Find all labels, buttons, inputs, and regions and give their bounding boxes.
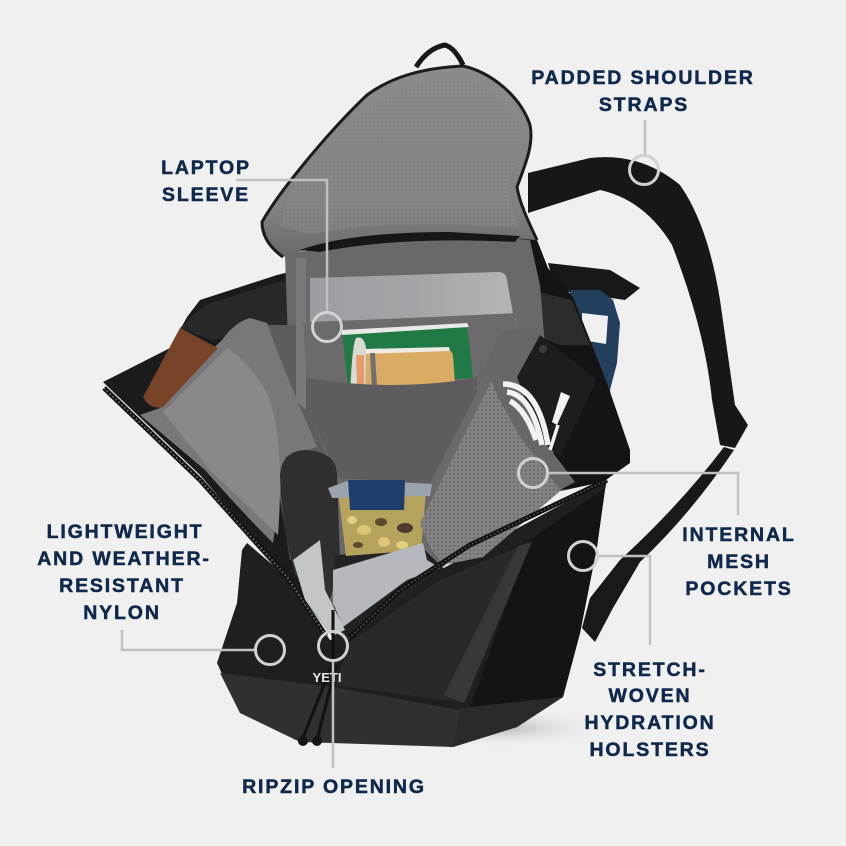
leather pouch <box>143 328 218 408</box>
backpack illustration <box>103 45 748 747</box>
right mesh pocket <box>420 378 573 565</box>
callout: padded shoulder straps: PADDED SHOULDER <box>531 67 755 89</box>
callout: ripzip opening <box>242 632 426 798</box>
callout: hydration holsters <box>568 542 716 761</box>
callout: ripzip opening: RIPZIP OPENING <box>242 776 426 798</box>
body side behind pockets <box>440 236 630 510</box>
brand mark: YETI <box>313 670 341 685</box>
dark shadow under flap <box>300 232 520 252</box>
floor shadow <box>390 708 610 748</box>
laptop sleeve pocket <box>303 313 519 395</box>
callout: nylon <box>37 521 284 664</box>
callout: internal mesh pockets <box>518 458 796 600</box>
snack container <box>328 480 432 556</box>
webbing strip <box>444 542 532 703</box>
callout: internal mesh pockets: INTERNAL <box>682 524 796 546</box>
callout: nylon: AND WEATHER- <box>37 548 211 570</box>
callout: hydration holsters: WOVEN <box>609 685 691 707</box>
water bottle in holster <box>280 450 340 600</box>
seam strip <box>296 258 306 410</box>
callout: internal mesh pockets: POCKETS <box>685 578 793 600</box>
callout: nylon: RESISTANT <box>59 575 185 597</box>
carry handle <box>416 45 463 67</box>
callout: laptop sleeve: LAPTOP <box>161 157 251 179</box>
left flap zipper <box>104 388 326 636</box>
lower body <box>217 480 607 747</box>
callout: padded shoulder straps <box>531 67 755 184</box>
mesh pocket rim <box>473 330 575 490</box>
dark cavity <box>333 550 445 640</box>
main zipper <box>347 480 607 640</box>
blue bottle <box>570 290 620 420</box>
white cable <box>503 384 570 450</box>
left flap outer <box>103 270 335 640</box>
callout: hydration holsters: STRETCH- <box>593 659 707 681</box>
callout: laptop sleeve <box>161 157 342 342</box>
phone <box>517 335 597 457</box>
callout: hydration holsters: HOLSTERS <box>590 739 710 761</box>
callout: nylon: LIGHTWEIGHT <box>47 521 203 543</box>
left inner pocket <box>140 318 317 543</box>
zip pulls <box>298 610 336 746</box>
interior back wall <box>285 237 555 610</box>
callout: nylon: NYLON <box>83 602 161 624</box>
callout: laptop sleeve: SLEEVE <box>162 184 250 206</box>
front panel <box>335 542 530 703</box>
notebook <box>342 325 473 386</box>
callout: padded shoulder straps: STRAPS <box>599 94 689 116</box>
front organizer pocket <box>307 378 477 483</box>
top mesh flap <box>262 66 537 257</box>
callout: internal mesh pockets: MESH <box>707 551 771 573</box>
flap zipper <box>262 66 537 257</box>
shoulder strap <box>528 157 748 642</box>
laptop sleeve <box>310 272 513 322</box>
callout: hydration holsters: HYDRATION <box>584 712 716 734</box>
light clothing bag <box>293 540 345 636</box>
black side panel <box>470 488 605 708</box>
base panel <box>220 673 460 747</box>
phone camera <box>539 345 547 353</box>
